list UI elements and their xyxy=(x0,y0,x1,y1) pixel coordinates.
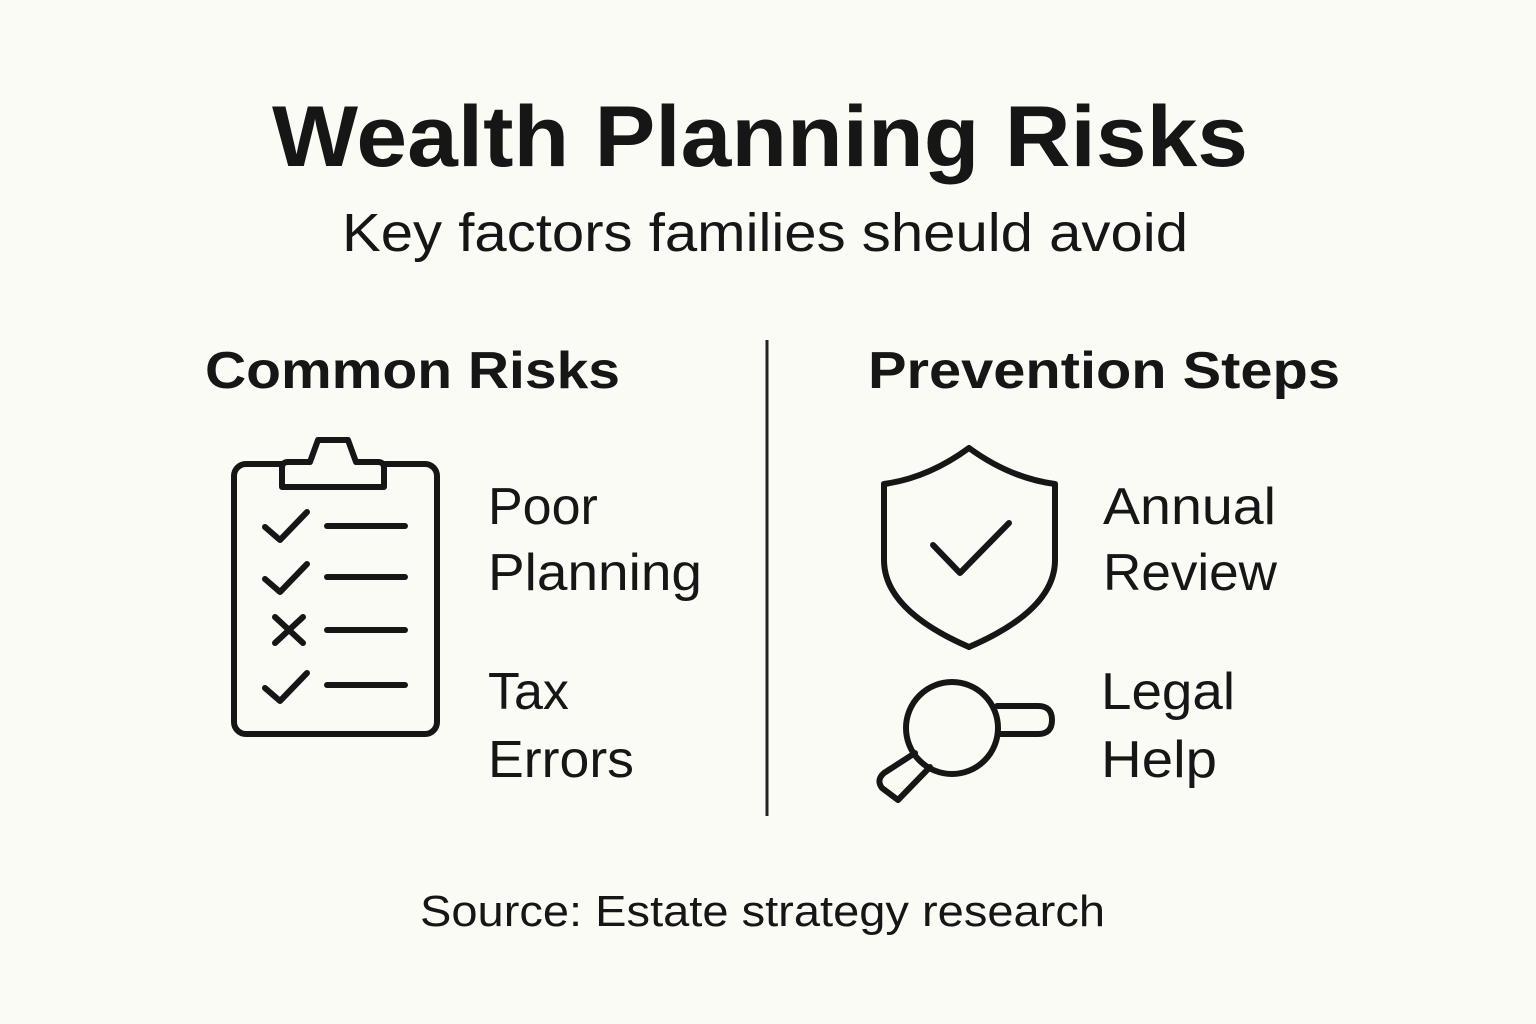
icon: clipboard xyxy=(234,440,437,734)
text: tax errors xyxy=(488,663,634,789)
text: legal help: Legal xyxy=(1101,663,1235,721)
text: annual review: Review xyxy=(1103,544,1277,602)
text: annual review xyxy=(1103,478,1277,602)
source: Source: Estate strategy research xyxy=(420,887,1105,936)
text: poor planning: Planning xyxy=(488,544,702,602)
heading: prevention steps: Prevention Steps xyxy=(868,342,1340,400)
text: legal help: Help xyxy=(1101,731,1217,789)
text: annual review: Annual xyxy=(1103,478,1276,536)
text: poor planning xyxy=(488,478,702,602)
icon: shield xyxy=(884,448,1055,647)
title: Wealth Planning Risks xyxy=(272,89,1248,185)
icon: magnifier xyxy=(879,682,1052,800)
subtitle: Key factors families sheuld avoid xyxy=(342,203,1188,263)
text: tax errors: Errors xyxy=(488,731,634,789)
text: tax errors: Tax xyxy=(488,663,569,721)
heading: common risks: Common Risks xyxy=(205,342,620,400)
text: legal help xyxy=(1101,663,1235,789)
text: poor planning: Poor xyxy=(488,478,598,536)
